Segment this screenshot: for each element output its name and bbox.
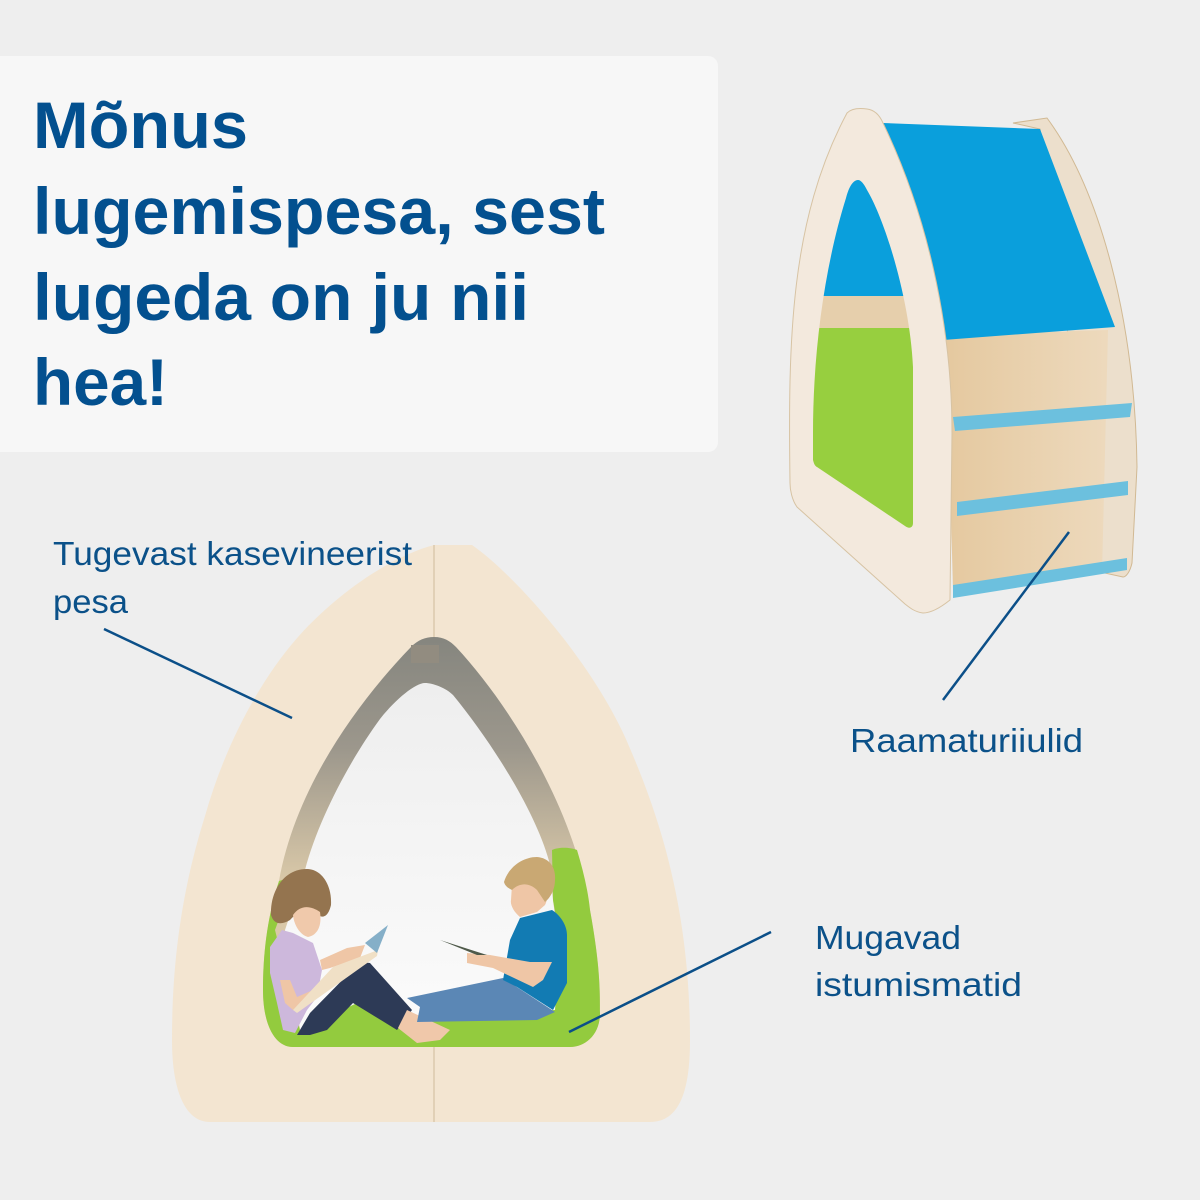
green mats (263, 848, 600, 1047)
shelves (953, 403, 1132, 598)
face (293, 907, 320, 937)
plywood nest body (172, 545, 690, 1122)
shirt (270, 930, 322, 1033)
book (440, 940, 487, 955)
label: bookshelves: Raamaturiiulid (850, 722, 1083, 759)
front plywood panel (790, 108, 952, 613)
child: girl (270, 869, 450, 1043)
title (33, 88, 605, 419)
shelf back wood (946, 330, 1108, 590)
leader line: bookshelves (943, 532, 1069, 700)
jeans (407, 978, 555, 1022)
shirt (503, 910, 567, 1010)
head (511, 883, 547, 917)
legs (297, 962, 412, 1035)
label: mats: istumismatid (815, 966, 1022, 1003)
hair (271, 869, 331, 923)
arms (280, 945, 365, 1010)
window with blue roof, wood strip and green mat (813, 180, 913, 528)
title: lugeda on ju nii (33, 260, 529, 334)
label: mats: Mugavad (815, 919, 961, 956)
label: mats (815, 919, 1022, 1003)
leader line: mats (569, 932, 771, 1032)
back side panel (1013, 118, 1137, 577)
leader line: plywood (104, 629, 292, 718)
light interior (285, 683, 567, 1030)
book (293, 950, 378, 1013)
bracket (411, 645, 439, 663)
label: plywood: Tugevast kasevineerist (53, 535, 412, 572)
product photo: nest with children (172, 545, 690, 1122)
product photo: bookshelf side view (790, 108, 1137, 613)
title panel (0, 56, 718, 452)
seams (433, 545, 435, 1122)
label: plywood (53, 535, 412, 620)
title: lugemispesa, sest (33, 174, 605, 248)
inner shaded edge (263, 637, 600, 1047)
blue roof (883, 123, 1115, 340)
feet (398, 1010, 450, 1043)
child: boy (407, 857, 567, 1022)
arm (467, 953, 552, 987)
title: Mõnus (33, 88, 248, 162)
hair (504, 857, 555, 902)
label: plywood: pesa (53, 583, 129, 620)
title: hea! (33, 345, 168, 419)
